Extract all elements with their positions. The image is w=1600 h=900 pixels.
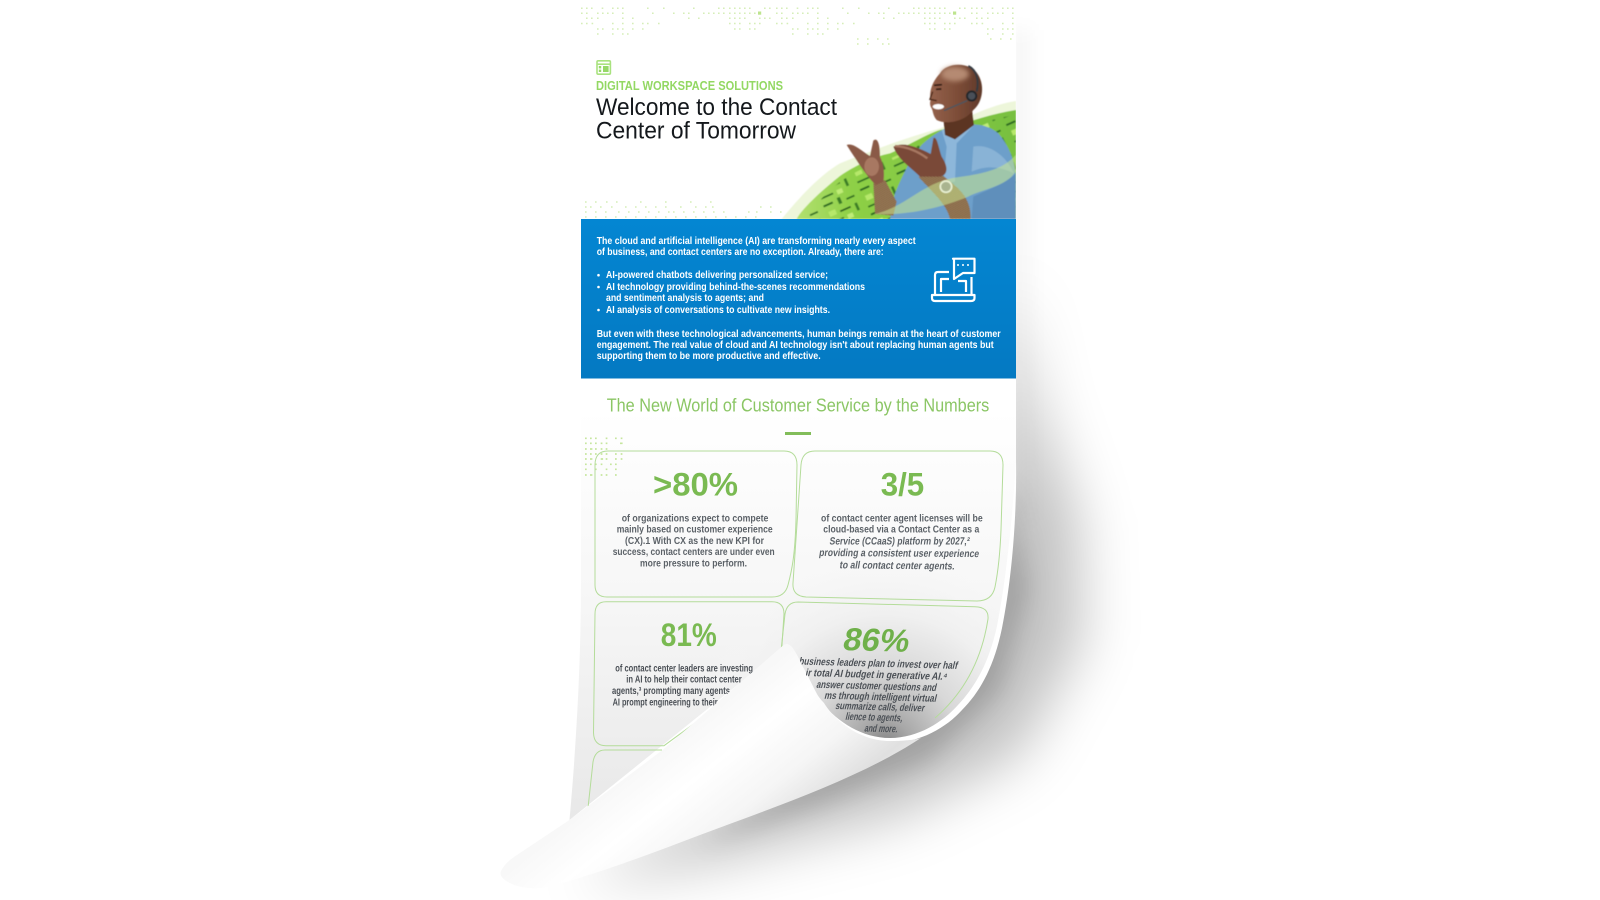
bullet list: AI analysis of conversations to cultivate new insights.	[606, 304, 830, 316]
closing paragraph: supporting them to be more productive and effective.	[597, 350, 821, 362]
curled page corner flap	[501, 644, 921, 888]
right hand	[893, 138, 946, 177]
card: 86 percent: lience to agents,	[844, 711, 904, 724]
card: three fifths: to all contact center agents.	[839, 559, 956, 572]
card: 81 percent: AI prompt engineering to their	[613, 696, 718, 708]
bottom dot pattern of hero	[585, 202, 782, 217]
right finger highlight	[895, 146, 927, 158]
card corner dots	[585, 438, 623, 475]
closing paragraph	[597, 328, 1001, 362]
card: over 80 percent: (CX).1 With CX as the new KPI for	[625, 535, 764, 547]
hero photo: agent with headset over green wave	[782, 65, 1016, 219]
bullet list: and sentiment analysis to agents; and	[606, 292, 764, 304]
card: 81 percent: in AI to help their contact center	[626, 673, 742, 685]
card: 86 percent: business leaders plan to invest over half	[798, 656, 959, 672]
top dot pattern	[581, 5, 1016, 41]
icon: browser window	[597, 61, 610, 74]
bullet list: AI-powered chatbots delivering personalized service;	[606, 269, 828, 281]
forehead highlight	[941, 67, 969, 81]
section heading: The New World of Customer Service by the Numbers	[607, 395, 989, 416]
bullet list	[597, 269, 865, 316]
card: three fifths: cloud-based via a Contact Center as a	[823, 524, 979, 536]
card: three fifths	[793, 451, 1003, 601]
card: over 80 percent: success, contact centers are under even	[613, 546, 775, 558]
top dot pattern extension	[857, 39, 1012, 44]
green wave	[782, 101, 1016, 219]
shirt highlights	[942, 124, 975, 183]
title: Welcome to the Contact	[596, 94, 837, 121]
card: over 80 percent	[595, 451, 797, 597]
card: 81 percent	[594, 602, 784, 746]
translucent mesh veil	[875, 155, 1016, 214]
card: 86 percent: ms through intelligent virtual	[823, 690, 938, 705]
card: over 80 percent: of organizations expect to compete	[622, 513, 769, 525]
left forearm	[873, 180, 897, 216]
closing paragraph: engagement. The real value of cloud and AI technology isn't about replacing human agents but	[597, 339, 994, 351]
icon: laptop with chat bubble	[932, 259, 974, 301]
shirt light patch	[972, 146, 1014, 173]
card: 86 percent: summarize calls, deliver	[834, 700, 926, 714]
right forearm	[918, 176, 971, 219]
card: 86 percent	[780, 602, 988, 735]
curl shadow on page	[802, 622, 978, 738]
card: three fifths: Service (CCaaS) platform by 2027,²	[829, 535, 971, 547]
left hand	[847, 140, 884, 185]
bullet list: AI technology providing behind-the-scenes recommendations	[606, 281, 865, 293]
card: 86 percent: 86%	[840, 621, 913, 659]
intro text: of business, and contact centers are no exception. Already, there are:	[597, 246, 884, 258]
shirt	[890, 125, 1016, 219]
head	[930, 65, 982, 122]
card: 81 percent: 81%	[661, 617, 717, 653]
card: 86 percent: answer customer questions and	[815, 679, 938, 694]
card: over 80 percent: >80%	[653, 467, 738, 503]
shirt lower shadow	[972, 173, 1016, 219]
nose shadow	[930, 92, 937, 101]
page sheet	[570, 0, 1016, 820]
blue intro panel	[581, 219, 1016, 378]
title	[596, 94, 837, 145]
card: over 80 percent: mainly based on customer experience	[617, 524, 773, 536]
card: 86 percent: and more.	[863, 723, 899, 735]
eyebrow label: DIGITAL WORKSPACE SOLUTIONS	[596, 79, 783, 93]
card: partial fifth card	[588, 750, 662, 808]
infographic page	[570, 8, 1016, 820]
card: 81 percent: agents,³ prompting many agents	[612, 685, 730, 697]
headset	[944, 66, 978, 111]
closing paragraph: But even with these technological advancements, human beings remain at the heart of customer	[597, 328, 1001, 340]
card: three fifths: providing a consistent user experience	[818, 547, 980, 560]
intro text	[597, 235, 916, 258]
title: Center of Tomorrow	[596, 118, 796, 145]
smile	[933, 104, 944, 109]
card: 86 percent: ir total AI budget in generative AI.⁴	[804, 667, 949, 683]
neck	[943, 107, 974, 139]
intro text: The cloud and artificial intelligence (AI) are transforming nearly every aspect	[597, 235, 916, 247]
white rim of curled page edge	[822, 460, 1016, 743]
watch	[940, 181, 952, 192]
card: three fifths: of contact center agent licenses will be	[821, 513, 983, 525]
card: over 80 percent: more pressure to perform.	[640, 558, 747, 570]
page drop shadow	[580, 30, 1082, 885]
card: three fifths: 3/5	[881, 467, 924, 503]
card: 81 percent: of contact center leaders are investing	[615, 662, 753, 674]
left palm highlight	[864, 157, 879, 176]
heading rule	[785, 432, 811, 435]
eye and brow	[934, 85, 942, 89]
